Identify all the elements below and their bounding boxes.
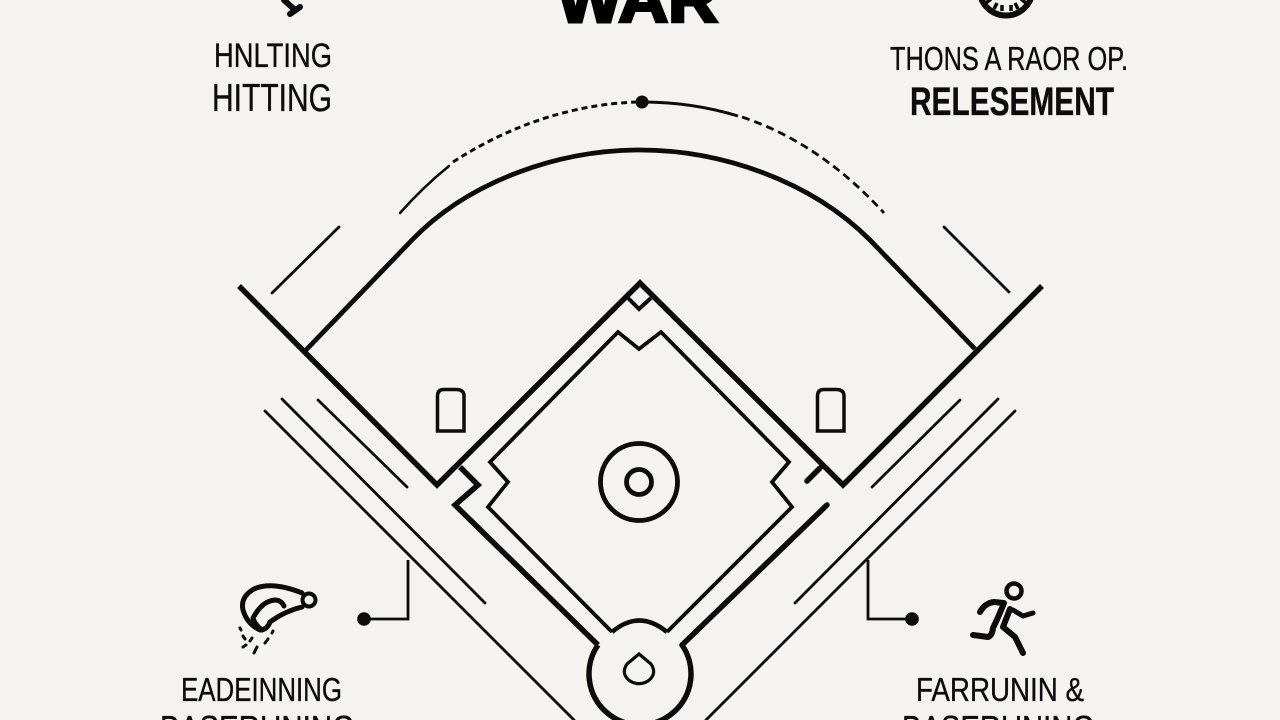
outfield accent lines <box>265 227 1015 720</box>
label: replacement <box>890 40 1128 124</box>
label: left bottom: EADEINNING <box>181 671 342 708</box>
base path left <box>455 467 598 645</box>
dugout left <box>438 390 464 431</box>
connector right <box>868 560 919 626</box>
label: right bottom <box>902 671 1095 720</box>
label: hitting: HNLTING <box>214 37 332 75</box>
dugout right <box>818 390 844 431</box>
dashed arc above outfield <box>400 96 884 213</box>
outfield wall arc <box>306 150 975 350</box>
label: hitting <box>212 37 332 120</box>
label: right bottom: FARRUNIN & <box>916 671 1084 708</box>
label: replacement: RELESEMENT <box>910 80 1114 124</box>
second base <box>628 298 651 309</box>
label: left bottom <box>160 671 355 720</box>
label: replacement: THONS A RAOR OP. <box>890 40 1128 77</box>
icon: cap or glove <box>240 586 316 653</box>
icon: bat <box>284 0 300 14</box>
icon: runner <box>973 584 1033 653</box>
connector left <box>357 560 408 626</box>
foul lines and infield edge <box>239 283 1042 485</box>
base path right <box>682 468 827 645</box>
label: hitting: HITTING <box>212 77 332 120</box>
icon: baseball <box>980 0 1032 16</box>
pitcher's mound <box>600 444 678 520</box>
inner diamond <box>488 332 792 632</box>
home plate circle <box>589 620 691 720</box>
